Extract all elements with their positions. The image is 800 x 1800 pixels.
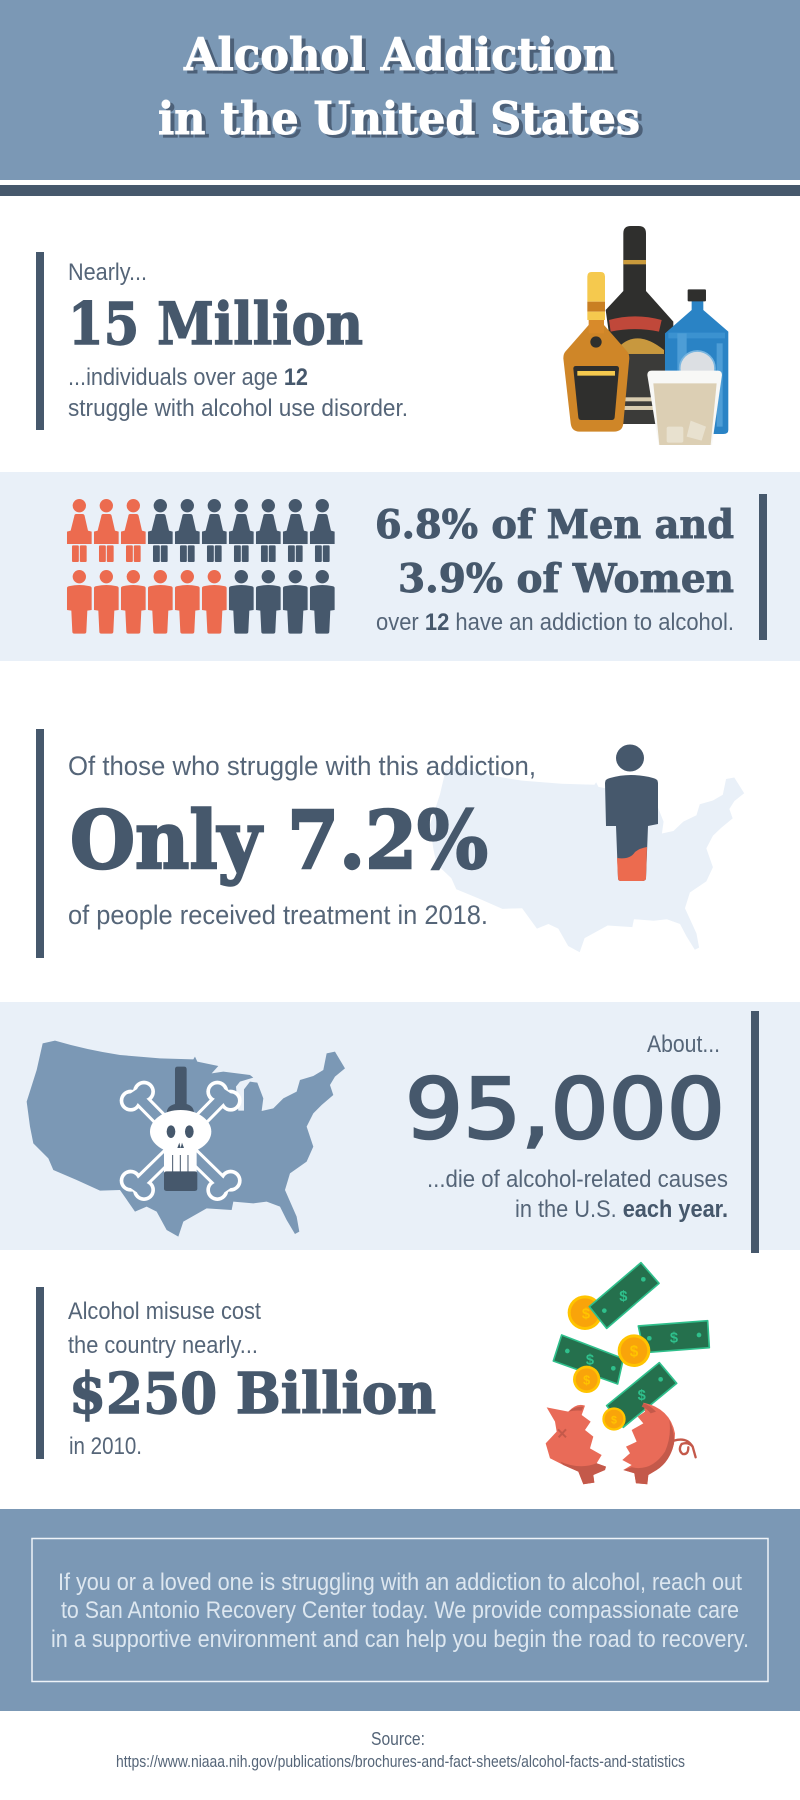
panel: 95,000 deaths: ...die of alcohol-related causes [427, 1166, 728, 1193]
stat: 15 million: 15 Million [68, 290, 363, 358]
panel: 95,000 deaths: in the U.S. each year. [515, 1196, 728, 1223]
title [158, 28, 640, 145]
title: Alcohol Addiction [183, 28, 614, 81]
panel: 15 million: Nearly... [68, 259, 147, 286]
panel: cost: Alcohol misuse cost [68, 1298, 261, 1325]
panel: 15 million [36, 226, 728, 445]
icon: broken piggy bank with money [546, 1263, 709, 1484]
icon: broken piggy bank with money: $ [619, 1289, 627, 1305]
panel: 95,000 deaths [0, 1002, 800, 1253]
icon: broken piggy bank with money: $ [630, 1344, 639, 1361]
text block: call to action [51, 1569, 749, 1653]
text block: call to action: If you or a loved one is struggling with an addiction to alcohol, reach out [58, 1569, 742, 1596]
stat: $250 billion: $250 Billion [69, 1361, 436, 1427]
pictogram: women row, 3 of 10 highlighted [67, 499, 335, 562]
icon: broken piggy bank with money: $ [582, 1306, 590, 1322]
source [116, 1729, 685, 1771]
stat: 95,000: 95,000 [405, 1061, 725, 1158]
panel: call to action [0, 1509, 800, 1711]
icon: broken piggy bank with money: $ [611, 1414, 617, 1426]
icon: liquor bottles and glass [563, 226, 728, 445]
icon: broken piggy bank with money: $ [583, 1373, 590, 1387]
icon: broken piggy bank with money: $ [586, 1353, 594, 1369]
map with skull, crossbones and bottle [27, 1041, 345, 1237]
map: United States, light [430, 767, 744, 952]
panel: cost: in 2010. [69, 1433, 142, 1460]
header banner [0, 0, 800, 180]
panel: cost: the country nearly... [68, 1332, 258, 1359]
icon: broken piggy bank with money: $ [638, 1388, 646, 1404]
source: https://www.niaaa.nih.gov/publications/brochures-and-fact-sheets/alcohol-facts-and-statistics [116, 1752, 685, 1771]
source: Source: [371, 1729, 425, 1749]
panel: treatment [36, 729, 744, 958]
panel: treatment: of people received treatment in 2018. [68, 900, 488, 930]
panel: men and women [0, 472, 800, 661]
panel: 95,000 deaths: About... [647, 1031, 720, 1058]
panel: men and women: over 12 have an addiction to alcohol. [376, 609, 734, 636]
stat: women: 3.9% of Women [398, 556, 734, 602]
stat: only 7.2%: Only 7.2% [70, 793, 488, 887]
pictogram: men row, 6 of 10 highlighted [67, 570, 335, 634]
icon: person partly filled [605, 744, 658, 881]
stat: men: 6.8% of Men and [375, 502, 734, 548]
panel: 15 million: struggle with alcohol use disorder. [68, 395, 408, 422]
icon: broken piggy bank with money: $ [670, 1331, 678, 1347]
panel: treatment: Of those who struggle with this addiction, [68, 751, 536, 781]
panel: cost [36, 1263, 709, 1484]
panel: 15 million: ...individuals over age 12 [68, 364, 308, 391]
title: in the United States [158, 92, 640, 145]
